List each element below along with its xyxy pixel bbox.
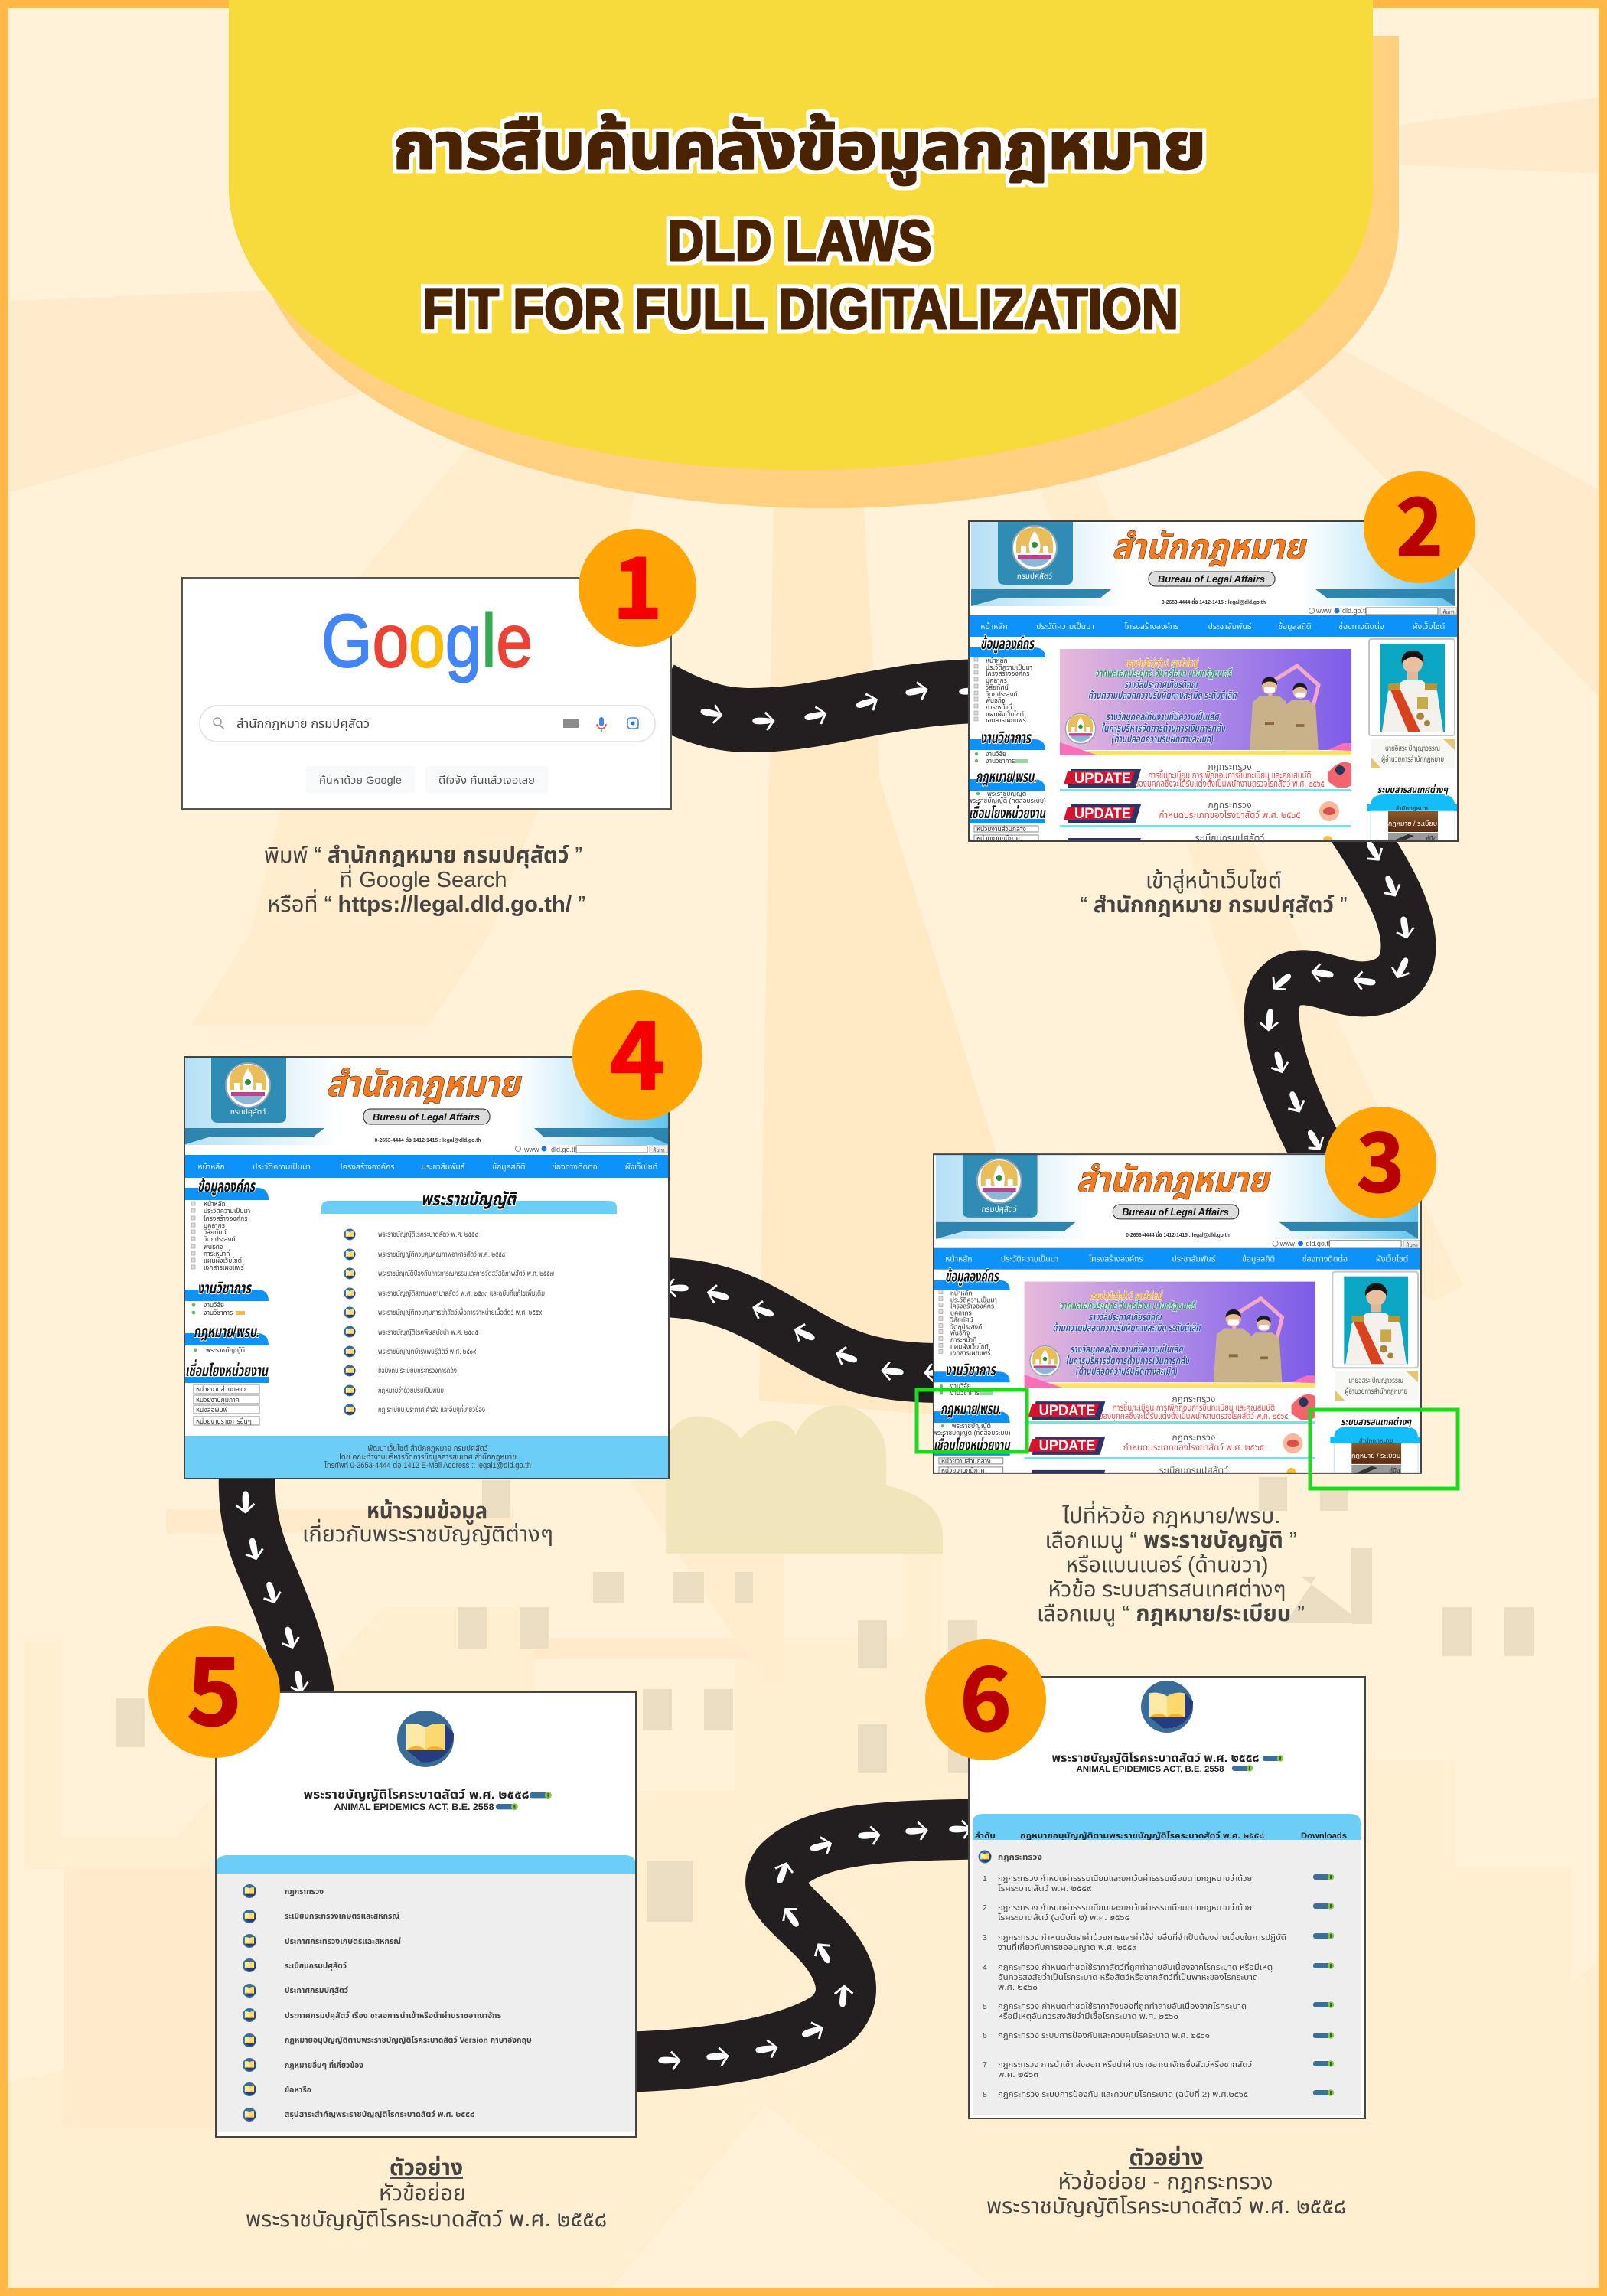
road 3 to 4 [658,1278,947,1382]
site banner: รางวัลบุคคล/ทีมงานที่มีความเป็นเลิศ [1106,709,1220,723]
site navigation: หน้าหลัก [197,1163,225,1172]
site sidebar: งานวิจัย [204,1301,224,1309]
act title: พระราชบัญญัติโรคระบาดสัตว์ พ.ศ. ๒๕๕๘ [303,1789,530,1802]
site banner: ในการบริหารจัดการด้านการเงินการคลัง [1065,1354,1190,1366]
update rows: ระเบียบกรมปศุสัตว์ [1159,1465,1228,1476]
table body: กฎกระทรวง [998,1853,1042,1862]
highlight: sidebar menu [917,1390,1027,1452]
site sidebar: แผนผังเว็บไซต์ [204,1257,242,1264]
site navigation [184,1155,670,1178]
site search row: www [523,1146,539,1153]
site sidebar: ภาระหน้าที่ [986,703,1012,711]
caption step 6: หัวข้อย่อย - กฎกระทรวง [1058,2170,1273,2194]
site footer: พัฒนาเว็บไซต์ สำนักกฎหมาย กรมปศุสัตว์ [367,1444,488,1453]
panel: step 6 ministerial regulations table [968,1676,1366,2119]
site sidebar [184,1178,269,1425]
site sidebar: เชื่อมโยงหน่วยงาน [969,802,1046,822]
table body: 7 [983,2060,987,2069]
site navigation: ผังเว็บไซต์ [1376,1254,1408,1264]
table header [973,1814,1361,1841]
caption step 1: หรือที่ “ https://legal.dld.go.th/ ” [267,889,585,917]
acts list: พระราชบัญญัติป้องกันการทารุณกรรมและการจัดสวัสดิภาพสัตว์ พ.ศ. ๒๕๕๗ [378,1270,554,1278]
badge 4: 4 [610,981,665,1117]
site navigation: ผังเว็บไซต์ [1413,621,1445,631]
site sidebar: ข้อมูลองค์กร [197,1178,256,1196]
information systems box: กฎหมาย / ระเบียบ [1388,820,1437,827]
site sidebar: โครงสร้างองค์กร [986,670,1029,677]
table body: โรคระบาดสัตว์ (ฉบับที่ ๒) พ.ศ. ๒๕๖๔ [998,1912,1129,1923]
header yellow shape [229,0,1373,470]
search buttons: ดีใจจัง ค้นแล้วเจอเลย [438,774,535,786]
site sidebar: งานวิชาการ [950,1389,980,1397]
site sidebar: กฎหมาย/พรบ. [976,768,1037,786]
table body: อันควรสงสัยว่าเป็นโรคระบาด หรือสัตว์หรือซากสัตว์ที่เป็นพาหะของโรคระบาด [998,1971,1258,1982]
site navigation: ประชาสัมพันธ์ [1208,622,1252,631]
list box: กฎหมายอนุบัญญัติตามพระราชบัญญัติโรคระบาดสัตว์ Version ภาษาอังกฤษ [285,2036,532,2045]
site banner: รางวัลประกาศเกียรติคุณ [1124,678,1198,691]
site sidebar: งานวิจัย [986,750,1006,758]
site sidebar: งานวิชาการ [980,729,1032,747]
badge 5 [148,1617,280,1758]
acts list: กฎ ระเบียบ ประกาศ คำสั่ง และอื่นๆที่เกี่ยวข้อง [378,1404,485,1414]
site sidebar: วัตถุประสงค์ [204,1235,236,1243]
director photo [1369,639,1455,768]
site sidebar: แผนผังเว็บไซต์ [950,1342,989,1350]
icon: book [1141,1681,1193,1733]
update rows: การขึ้นทะเบียน การเพิกถอนการขึ้นทะเบียน และคุณสมบัติ [1148,768,1312,781]
site sidebar: วัตถุประสงค์ [950,1322,982,1330]
site search row: dld.go.th [551,1146,578,1153]
site navigation: หน้าหลัก [980,622,1008,631]
site search row: dld.go.th [1342,607,1369,615]
information systems box: คู่มือ [1426,834,1437,843]
site navigation: ผังเว็บไซต์ [625,1162,657,1172]
table body: 4 [983,1963,987,1972]
site sidebar [933,1268,1011,1475]
site header: กรมปศุสัตว์ [1017,572,1052,581]
list box: ประกาศกระทรวงเกษตรและสหกรณ์ [285,1937,401,1946]
site sidebar: กฎหมาย/พรบ. [194,1323,259,1341]
site sidebar: ข้อมูลองค์กร [980,635,1035,654]
table body: กฎกระทรวง ระบบการป้องกัน และควบคุมโรคระบาด (ฉบับที่ 2) พ.ศ.๒๕๖๕ [998,2089,1248,2099]
site footer: โทรศัพท์ 0-2653-4444 ต่อ 1412 E-Mail Address :: legal1@dld.go.th [324,1460,531,1470]
google logo: Google [321,598,533,683]
panel: step 3 website home with highlights [933,1153,1422,1476]
update rows [1025,1394,1315,1477]
list box: ประกาศกรมปศุสัตว์ เรื่อง ชะลอการนำเข้าหรือนำผ่านราชอาณาจักร [285,2010,502,2020]
table body: กฎกระทรวง กำหนดอัตราค่าป่วยการและค่าใช้จ่ายอื่นที่จำเป็นต้องจ่ายเนื่องในการปฏิบัติ [998,1932,1286,1942]
director photo: นายอิสระ ปัญญาวรรณ [1348,1377,1403,1385]
caption step 3: เลือกเมนู “ พระราชบัญญัติ ” [1045,1528,1296,1554]
table body: กฎกระทรวง กำหนดค่าธรรมเนียมและยกเว้นค่าธรรมเนียมตามกฎหมายว่าด้วย [998,1903,1252,1913]
search buttons [306,766,548,793]
badge 2 [1364,463,1475,583]
site navigation: ช่องทางติดต่อ [552,1162,598,1172]
information systems box [1330,1416,1422,1475]
act title [1051,1752,1283,1774]
site search row [516,1146,668,1153]
site sidebar: หน้าหลัก [986,657,1008,664]
icon: book [397,1711,454,1767]
site search row: www [1315,607,1332,615]
site sidebar: หนังสือพิมพ์ [196,1406,228,1414]
site header: Bureau of Legal Affairs [1122,1206,1229,1218]
table header: Downloads [1301,1831,1347,1841]
site header [184,1056,670,1145]
caption step 1: พิมพ์ “ สำนักกฎหมาย กรมปศุสัตว์ ” [264,843,582,868]
road 1 to 2 [658,680,982,731]
caption step 5 [246,2156,607,2232]
table body: 1 [983,1874,987,1883]
site sidebar [968,635,1046,843]
site sidebar: โครงสร้างองค์กร [204,1215,247,1222]
search bar [200,706,655,742]
information systems box: คู่มือ [1389,1466,1400,1475]
site sidebar: เชื่อมโยงหน่วยงาน [934,1434,1011,1454]
site sidebar: ภาระหน้าที่ [204,1249,230,1257]
badge 4 [572,981,702,1120]
update rows: กฎกระทรวง [1172,1432,1215,1443]
update rows: UPDATE [1039,1438,1095,1454]
table body [973,1840,1361,2115]
table body: งานที่เกี่ยวกับการขออนุญาต พ.ศ. ๒๕๕๙ [998,1942,1137,1952]
update rows: ของบุคคลซึ่งจะได้รับแต่งตั้งเป็นพนักงานตรวจโรคสัตว์ พ.ศ. ๒๕๖๕ [1135,777,1325,789]
information systems box: กฎหมาย / ระเบียบ [1351,1452,1400,1459]
caption step 2: เข้าสู่หน้าเว็บไซต์ [1146,869,1282,894]
site sidebar: เอกสารเผยแพร่ [986,716,1026,724]
site banner: กรมปศุสัตว์คว้า 2 รางวัลใหญ่ [1125,657,1199,670]
director photo: นายอิสระ ปัญญาวรรณ [1385,745,1440,753]
site sidebar: หน่วยงานส่วนกลาง [196,1385,246,1393]
site sidebar: วิสัยทัศน์ [203,1228,227,1236]
site banner: ด้านความปลอดความรับผิดทางละเมิด ระดับดีเลิศ [1053,1321,1201,1333]
site header: กรมปศุสัตว์ [982,1205,1017,1214]
title [393,110,1206,341]
badge 1 [579,520,696,647]
update rows: กำหนดประเภทของโรงฆ่าสัตว์ พ.ศ. ๒๕๖๕ [1123,1442,1264,1453]
caption step 3: หรือแบนเนอร์ (ด้านขวา) [1065,1553,1269,1577]
subtitle line 1: DLD LAWS [667,209,932,272]
act title [303,1789,552,1812]
badge 1: 1 [613,520,662,643]
badge 2: 2 [1396,463,1443,579]
acts list: พระราชบัญญัติควบคุมคุณภาพอาหารสัตว์ พ.ศ. ๒๕๕๘ [378,1251,505,1259]
search buttons: ค้นหาด้วย Google [319,774,402,786]
update rows: UPDATE [1039,1403,1095,1419]
site sidebar: วัตถุประสงค์ [986,690,1018,698]
caption step 5: หัวข้อย่อย [379,2181,466,2206]
caption step 3: ไปที่หัวข้อ กฎหมาย/พรบ. [1061,1500,1281,1528]
act title: ANIMAL EPIDEMICS ACT, B.E. 2558 [1076,1765,1224,1774]
site header: สำนักกฎหมาย [1112,527,1307,566]
site banner: ในการบริหารจัดการด้านการเงินการคลัง [1101,722,1226,734]
highlight: information banner [1310,1410,1458,1489]
site navigation: ช่องทางติดต่อ [1338,621,1384,631]
site header: 0-2653-4444 ต่อ 1412-1415 : legal@dld.go.th [1126,1231,1230,1238]
acts list: พระราชบัญญัติสถานพยาบาลสัตว์ พ.ศ. ๒๕๓๓ และฉบับที่แก้ไขเพิ่มเติม [378,1288,545,1298]
title: การสืบค้นคลังข้อมูลกฎหมาย [393,110,1206,185]
list box: กฎหมายอื่นๆ ที่เกี่ยวข้อง [285,2060,363,2070]
panel: step 4 acts list page [184,1056,670,1479]
site sidebar: แผนผังเว็บไซต์ [986,710,1024,718]
site sidebar: ประวัติความเป็นมา [986,664,1032,671]
site banner: จากพลเอกประยุทธ์ จันทร์โอชา นายกรัฐมนตรี [1095,667,1232,680]
caption step 3 [1037,1500,1305,1627]
site banner: (ด้านปลอดความรับผิดทางละเมิด) [1076,1365,1178,1377]
site sidebar: เชื่อมโยงหน่วยงาน [185,1359,269,1380]
site sidebar: หน่วยงานภูมิภาค [196,1396,240,1404]
table body: 3 [983,1933,987,1942]
list box: ระเบียบกรมปศุสัตว์ [285,1962,347,1971]
update rows: กฎกระทรวง [1172,1394,1215,1404]
site sidebar: ภาระหน้าที่ [950,1335,976,1343]
site header: 0-2653-4444 ต่อ 1412-1415 : legal@dld.go.th [1162,598,1266,605]
site banner: ด้านความปลอดความรับผิดทางละเมิด ระดับดีเลิศ [1088,689,1237,701]
search bar: สำนักกฎหมาย กรมปศุสัตว์ [236,718,370,731]
site sidebar: พระราชบัญญัติ (ทดสอบระบบ) [933,1429,1011,1437]
table header: กฎหมายอนุบัญญัติตามพระราชบัญญัติโรคระบาดสัตว์ พ.ศ. ๒๕๕๘ [1020,1831,1264,1841]
acts list: ข้อบังคับ ระเบียบกระทรวงการคลัง [378,1367,457,1375]
site search row: ค้นหา [1406,1242,1418,1248]
site search row: ค้นหา [653,1147,665,1153]
site navigation: หน้าหลัก [945,1255,972,1264]
acts heading: พระราชบัญญัติ [421,1189,517,1210]
caption step 6 [986,2146,1346,2219]
site sidebar: วิสัยทัศน์ [985,683,1009,691]
site header: กรมปศุสัตว์ [230,1107,266,1117]
site sidebar: พระราชบัญญัติ [952,1422,991,1430]
site sidebar: งานวิชาการ [986,757,1015,765]
badge 3: 3 [1357,1097,1404,1215]
site header: Bureau of Legal Affairs [373,1111,480,1123]
site sidebar: หน่วยงานส่วนกลาง [941,1457,991,1465]
site sidebar: งานวิชาการ [197,1280,252,1297]
table body: พ.ศ. ๒๕๖๓ [998,2070,1038,2079]
update rows: UPDATE [1074,771,1131,787]
caption step 4 [302,1499,553,1547]
director photo [1332,1272,1418,1401]
site navigation: ประชาสัมพันธ์ [1172,1255,1216,1264]
site banner: (ด้านปลอดความรับผิดทางละเมิด) [1111,732,1214,745]
information systems box [1367,784,1459,843]
caption step 3: หัวข้อ ระบบสารสนเทศต่างๆ [1048,1577,1286,1602]
site sidebar: พระราชบัญญัติ [987,790,1026,797]
update rows: ระเบียบกรมปศุสัตว์ [1195,833,1264,843]
table body: กฎกระทรวง กำหนดค่าธรรมเนียมและยกเว้นค่าธรรมเนียมตามกฎหมายว่าด้วย [998,1874,1252,1883]
site sidebar: โครงสร้างองค์กร [950,1303,994,1310]
table body: กฎกระทรวง กำหนดค่าชดใช้ราคาสิ่งของที่ถูกทำลายอันเนื่องจากโรคระบาด [998,2001,1247,2011]
update rows: กฎกระทรวง [1208,800,1252,810]
caption step 5: ตัวอย่าง [390,2156,463,2180]
site sidebar: บุคลากร [950,1309,972,1316]
site banner: รางวัลบุคคล/ทีมงานที่มีความเป็นเลิศ [1070,1341,1184,1355]
site sidebar: ประวัติความเป็นมา [204,1207,250,1215]
acts list: พระราชบัญญัติโรคพิษสุนัขบ้า พ.ศ. ๒๕๓๕ [378,1329,478,1337]
badge 5: 5 [187,1617,242,1753]
caption step 6: ตัวอย่าง [1129,2146,1203,2170]
badge 6 [925,1629,1046,1760]
table body: โรคระบาดสัตว์ พ.ศ. ๒๕๕๙ [998,1884,1092,1893]
site sidebar: หน่วยงานราชการอื่นๆ [196,1417,252,1425]
site search row: www [1279,1240,1296,1247]
site sidebar: หน้าหลัก [950,1290,972,1297]
site search row [1309,607,1457,615]
site header [971,520,1455,606]
site navigation: โครงสร้างองค์กร [341,1163,394,1172]
list box [216,1855,636,2132]
caption step 2 [1081,869,1347,918]
caption step 5: พระราชบัญญัติโรคระบาดสัตว์ พ.ศ. ๒๕๕๘ [246,2207,607,2232]
list box: สรุปสาระสำคัญพระราชบัญญัติโรคระบาดสัตว์ พ.ศ. ๒๕๕๘ [285,2110,474,2119]
site sidebar: หน่วยงานภูมิภาค [941,1466,985,1475]
site sidebar: พันธกิจ [986,696,1005,704]
badge 6: 6 [960,1629,1012,1756]
caption step 1 [264,843,585,917]
site navigation: ประวัติความเป็นมา [1036,622,1094,631]
badge 3 [1325,1097,1436,1218]
information systems box: สำนักกฎหมาย [1359,1437,1393,1444]
site sidebar: หน่วยงานภูมิภาค [976,834,1020,843]
director photo: ผู้อำนวยการสำนักกฎหมาย [1345,1387,1407,1396]
update rows: ของบุคคลซึ่งจะได้รับแต่งตั้งเป็นพนักงานตรวจโรคสัตว์ พ.ศ. ๒๕๖๕ [1099,1409,1289,1421]
road 2 to 3 [1259,827,1416,1163]
site search row: dld.go.th [1305,1240,1332,1247]
update rows: กำหนดประเภทของโรงฆ่าสัตว์ พ.ศ. ๒๕๖๕ [1159,810,1301,820]
panel: step 1 google search [181,577,672,810]
list box: ประกาศกรมปศุสัตว์ [285,1986,348,1995]
site sidebar: พระราชบัญญัติ [206,1346,245,1354]
site sidebar: ข้อมูลองค์กร [945,1268,999,1287]
caption step 4: หน้ารวมข้อมูล [367,1499,487,1525]
site banner [1025,1282,1315,1388]
table body: 5 [983,2002,987,2011]
site sidebar: วิสัยทัศน์ [950,1316,973,1323]
site navigation: ประวัติความเป็นมา [1001,1255,1058,1264]
site header: สำนักกฎหมาย [326,1064,522,1104]
site navigation: ข้อมูลสถิติ [1278,622,1312,631]
site sidebar: พันธกิจ [950,1329,970,1336]
site search row: ค้นหา [1442,609,1455,615]
site banner: กรมปศุสัตว์คว้า 2 รางวัลใหญ่ [1090,1290,1163,1303]
site navigation: ประวัติความเป็นมา [253,1163,311,1172]
site sidebar: พระราชบัญญัติ (ทดสอบระบบ) [968,797,1046,804]
update rows [1060,762,1351,845]
table body: 6 [983,2031,987,2040]
site search row [1273,1240,1420,1248]
acts list: พระราชบัญญัติโรคระบาดสัตว์ พ.ศ. ๒๕๕๘ [378,1231,478,1239]
table body: หรือมีเหตุอันควรสงสัยว่ามีเชื้อโรคระบาด พ.ศ. ๒๕๖๐ [998,2011,1178,2021]
site sidebar: ประวัติความเป็นมา [950,1296,997,1304]
caption step 1: ที่ Google Search [340,864,507,892]
site sidebar: บุคลากร [986,677,1007,684]
act title: ANIMAL EPIDEMICS ACT, B.E. 2558 [334,1802,494,1812]
site header: Bureau of Legal Affairs [1158,573,1265,585]
table body: กฎกระทรวง กำหนดค่าชดใช้ราคาสัตว์ที่ถูกทำลายอันเนื่องจากโรคระบาด หรือมีเหตุ [998,1962,1273,1972]
acts list [344,1229,554,1416]
site navigation [968,615,1459,637]
site sidebar: กฎหมาย/พรบ. [940,1401,1002,1418]
site navigation [933,1248,1422,1270]
table body: 8 [983,2090,987,2099]
table header: ลำดับ [975,1831,996,1841]
site sidebar: งานวิชาการ [945,1362,996,1379]
site sidebar: หน้าหลัก [204,1200,226,1208]
site sidebar: เอกสารเผยแพร่ [204,1264,244,1271]
table body: กฎกระทรวง ระบบการป้องกันและควบคุมโรคระบาด พ.ศ. ๒๕๖๑ [998,2031,1210,2040]
site sidebar: บุคลากร [204,1221,225,1229]
caption step 3: เลือกเมนู “ กฎหมาย/ระเบียบ ” [1037,1602,1305,1627]
list box: ระเบียบกระทรวงเกษตรและสหกรณ์ [285,1912,399,1921]
site banner: รางวัลประกาศเกียรติคุณ [1088,1310,1162,1323]
update rows: การขึ้นทะเบียน การเพิกถอนการขึ้นทะเบียน และคุณสมบัติ [1113,1401,1275,1413]
site sidebar: พันธกิจ [204,1243,223,1251]
information systems box: สำนักกฎหมาย [1396,805,1430,812]
road 4 to 5 [236,1473,311,1703]
caption step 6: พระราชบัญญัติโรคระบาดสัตว์ พ.ศ. ๒๕๕๘ [986,2194,1346,2219]
acts list: พระราชบัญญัติควบคุมการฆ่าสัตว์เพื่อการจำหน่ายเนื้อสัตว์ พ.ศ. ๒๕๕๙ [378,1307,542,1317]
caption step 2: “ สำนักกฎหมาย กรมปศุสัตว์ ” [1081,893,1347,918]
site footer [184,1436,670,1479]
site sidebar: เอกสารเผยแพร่ [950,1349,991,1356]
header shadow shape [254,36,1399,508]
table body: 2 [983,1903,987,1913]
site navigation: ประชาสัมพันธ์ [422,1163,465,1172]
site navigation: โครงสร้างองค์กร [1089,1255,1143,1264]
site header: สำนักกฎหมาย [1076,1159,1271,1199]
site navigation: ข้อมูลสถิติ [1242,1255,1275,1264]
site footer: โดย คณะทำงานบริหารจัดการข้อมูลสารสนเทศ สำนักกฎหมาย [339,1453,517,1462]
site header [936,1153,1418,1239]
acts list: กฎหมายว่าด้วยปรับเป็นพินัย [378,1386,444,1395]
site sidebar: งานวิจัย [950,1382,971,1390]
update rows: UPDATE [1074,806,1131,822]
table body: กฎกระทรวง การนำเข้า ส่งออก หรือนำผ่านราชอาณาจักรซึ่งสัตว์หรือซากสัตว์ [998,2059,1252,2069]
table body: พ.ศ. ๒๕๖๐ [998,1983,1038,1992]
list box: ข้อหารือ [285,2085,311,2095]
site banner: จากพลเอกประยุทธ์ จันทร์โอชา นายกรัฐมนตรี [1059,1300,1196,1313]
acts list: พระราชบัญญัติบำรุงพันธุ์สัตว์ พ.ศ. ๒๕๐๙ [378,1348,476,1356]
site navigation: โครงสร้างองค์กร [1125,622,1178,631]
site header: 0-2653-4444 ต่อ 1412-1415 : legal@dld.go.th [375,1137,481,1143]
update rows: กฎกระทรวง [1208,762,1252,772]
site sidebar: หน่วยงานส่วนกลาง [976,825,1026,833]
acts heading [321,1189,617,1214]
list box: กฎกระทรวง [285,1887,324,1896]
site banner [1060,649,1351,755]
site sidebar: งานวิชาการ [204,1309,233,1316]
panel: step 2 website home [968,520,1459,843]
act title: พระราชบัญญัติโรคระบาดสัตว์ พ.ศ. ๒๕๕๘ [1051,1752,1260,1765]
panel: step 5 act sub-topics [215,1691,637,2138]
site navigation: ข้อมูลสถิติ [492,1163,526,1172]
subtitle line 2: FIT FOR FULL DIGITALIZATION [422,277,1178,341]
road 5 to 6 [631,1820,976,2070]
caption step 4: เกี่ยวกับพระราชบัญญัติต่างๆ [302,1518,553,1547]
site navigation: ช่องทางติดต่อ [1302,1254,1348,1264]
